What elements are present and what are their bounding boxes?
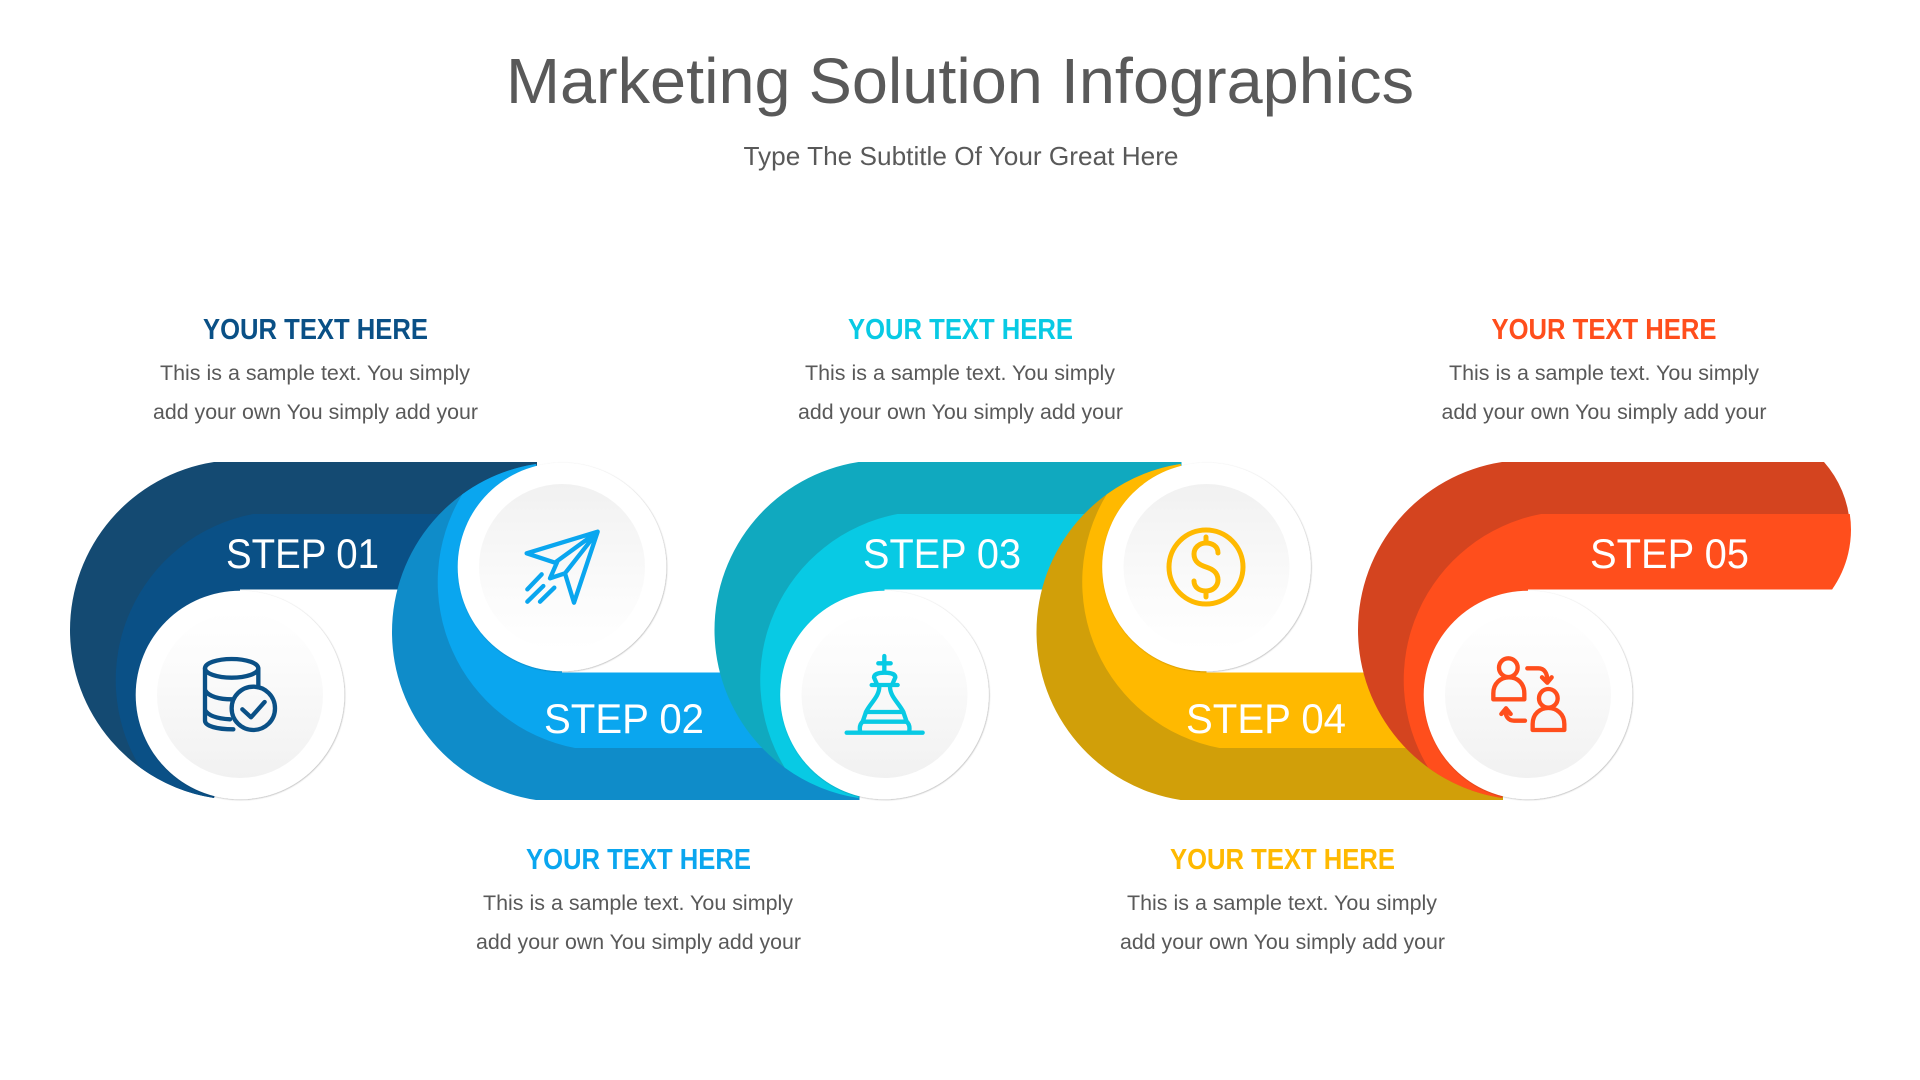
text block: step 02: add your own You simply add your: [476, 931, 801, 954]
text block: step 03: YOUR TEXT HERE: [848, 314, 1073, 346]
step 05 ribbon: [1358, 462, 1851, 799]
text block: step 04: add your own You simply add your: [1120, 931, 1445, 954]
icon: database with check: [205, 659, 275, 730]
step 02 ribbon: STEP 02: [544, 695, 704, 742]
icon: dollar coin: [1169, 530, 1243, 604]
text block: step 05: add your own You simply add your: [1442, 401, 1767, 424]
title: Marketing Solution Infographics: [506, 45, 1414, 117]
text block: step 03: [798, 314, 1123, 424]
text block: step 02: This is a sample text. You simply: [483, 892, 794, 915]
text block: step 01: [153, 314, 478, 424]
step 01 ribbon: [70, 462, 537, 799]
step 01 ribbon: STEP 01: [226, 530, 379, 577]
step 04 ribbon: [1036, 463, 1503, 800]
text block: step 03: This is a sample text. You simply: [805, 362, 1116, 385]
icon: people exchange: [1493, 658, 1564, 730]
text block: step 05: This is a sample text. You simply: [1449, 362, 1760, 385]
text block: step 03: add your own You simply add your: [798, 401, 1123, 424]
icon: paper plane: [527, 532, 598, 603]
text block: step 01: This is a sample text. You simply: [160, 362, 471, 385]
step 02 ribbon: [392, 463, 860, 800]
step 03 ribbon: STEP 03: [863, 530, 1021, 577]
text block: step 04: This is a sample text. You simply: [1127, 892, 1438, 915]
step 05 ribbon: STEP 05: [1590, 530, 1749, 577]
text block: step 01: YOUR TEXT HERE: [203, 314, 428, 346]
text block: step 01: add your own You simply add your: [153, 401, 478, 424]
text block: step 05: [1442, 314, 1767, 424]
subtitle: Type The Subtitle Of Your Great Here: [744, 141, 1178, 171]
text block: step 04: [1120, 844, 1445, 954]
icon: chess king: [847, 656, 923, 733]
step 03 ribbon: [715, 462, 1182, 799]
text block: step 04: YOUR TEXT HERE: [1170, 844, 1395, 876]
step 04 ribbon: STEP 04: [1186, 695, 1346, 742]
text block: step 02: [476, 844, 801, 954]
text block: step 02: YOUR TEXT HERE: [526, 844, 751, 876]
text block: step 05: YOUR TEXT HERE: [1492, 314, 1716, 346]
